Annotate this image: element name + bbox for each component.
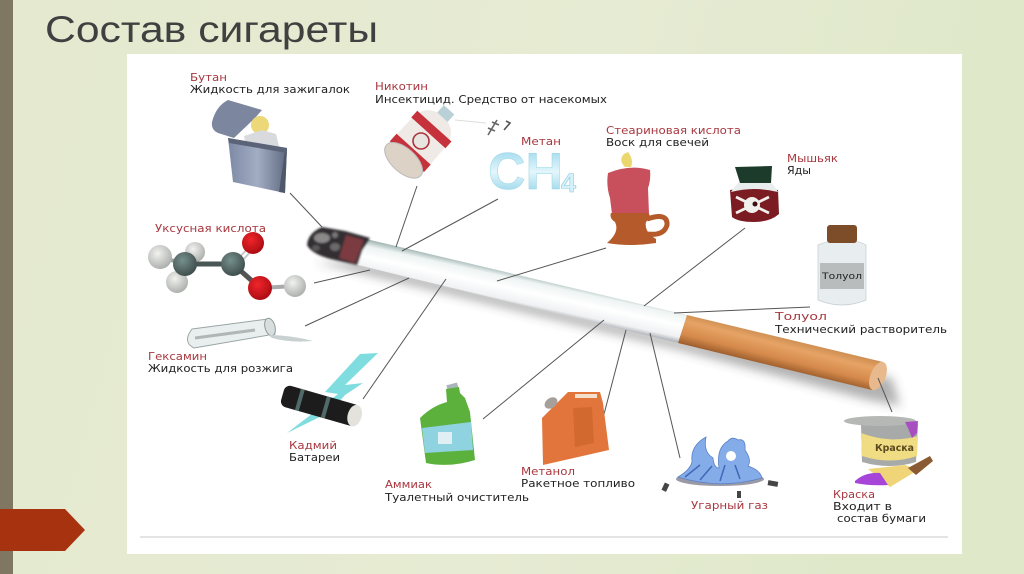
label: cadmium [289, 440, 340, 464]
label: ammonia: Туалетный очиститель [384, 492, 529, 504]
filter end [865, 359, 891, 393]
label: methanol: Ракетное топливо [521, 478, 635, 490]
icon: toluene bottle [818, 225, 866, 305]
label: paint: Входит в [833, 501, 892, 513]
cigarette [307, 227, 900, 406]
label: butane: Жидкость для зажигалок [190, 84, 350, 96]
icon: acetic acid molecule [148, 232, 306, 300]
icon: insecticide bottle [378, 94, 466, 185]
icon: small soot pieces [661, 480, 778, 498]
cigarette filter [678, 315, 883, 390]
icon: paint can and brush: Краска [875, 443, 914, 454]
label: nicotine: Никотин [375, 81, 428, 93]
label: cadmium: Батареи [289, 452, 340, 464]
label: arsenic [787, 153, 838, 177]
red arrow marker [0, 509, 85, 551]
icon: blue gas flame [676, 437, 764, 486]
leader lines [290, 186, 892, 458]
label: butane: Бутан [190, 72, 227, 84]
burnt ash tip [307, 227, 370, 265]
cigarette paper [350, 238, 687, 343]
icon: toluene bottle: Толуол [821, 272, 862, 282]
title: Состав сигареты [45, 9, 378, 50]
panel bottom rule [140, 536, 948, 538]
label: hexamine: Гексамин [148, 351, 207, 363]
label: acetic acid: Уксусная кислота [155, 223, 266, 235]
label: methane: Метан [521, 136, 561, 148]
label: nicotine [375, 81, 607, 106]
white picture panel [127, 54, 962, 554]
label: stearic acid: Стеариновая кислота [606, 125, 741, 137]
icon: poison bottle [730, 166, 779, 222]
icon: flying insects [455, 120, 510, 135]
label: toluene: Технический растворитель [774, 324, 947, 336]
label: stearic acid [606, 125, 741, 149]
label: butane [190, 72, 350, 96]
label: cadmium: Кадмий [289, 440, 337, 452]
icon: glass tube [187, 317, 313, 348]
left sidebar stripe [0, 0, 13, 574]
label: arsenic: Яды [787, 165, 811, 177]
label: hexamine [148, 351, 293, 375]
label: ammonia: Аммиак [385, 479, 432, 491]
label: stearic acid: Воск для свечей [606, 137, 709, 149]
label: toluene: Толуол [774, 311, 827, 323]
label: methanol: Метанол [521, 466, 575, 478]
icon: candle [607, 152, 667, 245]
label: hexamine: Жидкость для розжига [148, 363, 293, 375]
label: methanol [521, 466, 635, 490]
label: paint [833, 489, 926, 525]
icon: CH4 formula: CH [488, 143, 563, 201]
label: ammonia [384, 479, 529, 504]
icon: green cleaner bottle [420, 383, 475, 465]
icon: paint can and brush [844, 416, 933, 487]
label: paint: Краска [833, 489, 875, 501]
diagram: cigarette composition [148, 72, 947, 525]
label: arsenic: Мышьяк [787, 153, 838, 165]
label: nicotine: Инсектицид. Средство от насекомых [375, 94, 607, 106]
label: carbon monoxide: Угарный газ [691, 500, 768, 512]
icon: CH4 formula: 4 [561, 168, 576, 198]
icon: jerrycan [542, 392, 609, 465]
cigarette shadow [315, 262, 900, 406]
icon: battery with lightning bolt [280, 353, 378, 433]
label: paint: состав бумаги [837, 513, 926, 525]
label: toluene [774, 311, 947, 336]
icon: lighter [212, 100, 287, 193]
